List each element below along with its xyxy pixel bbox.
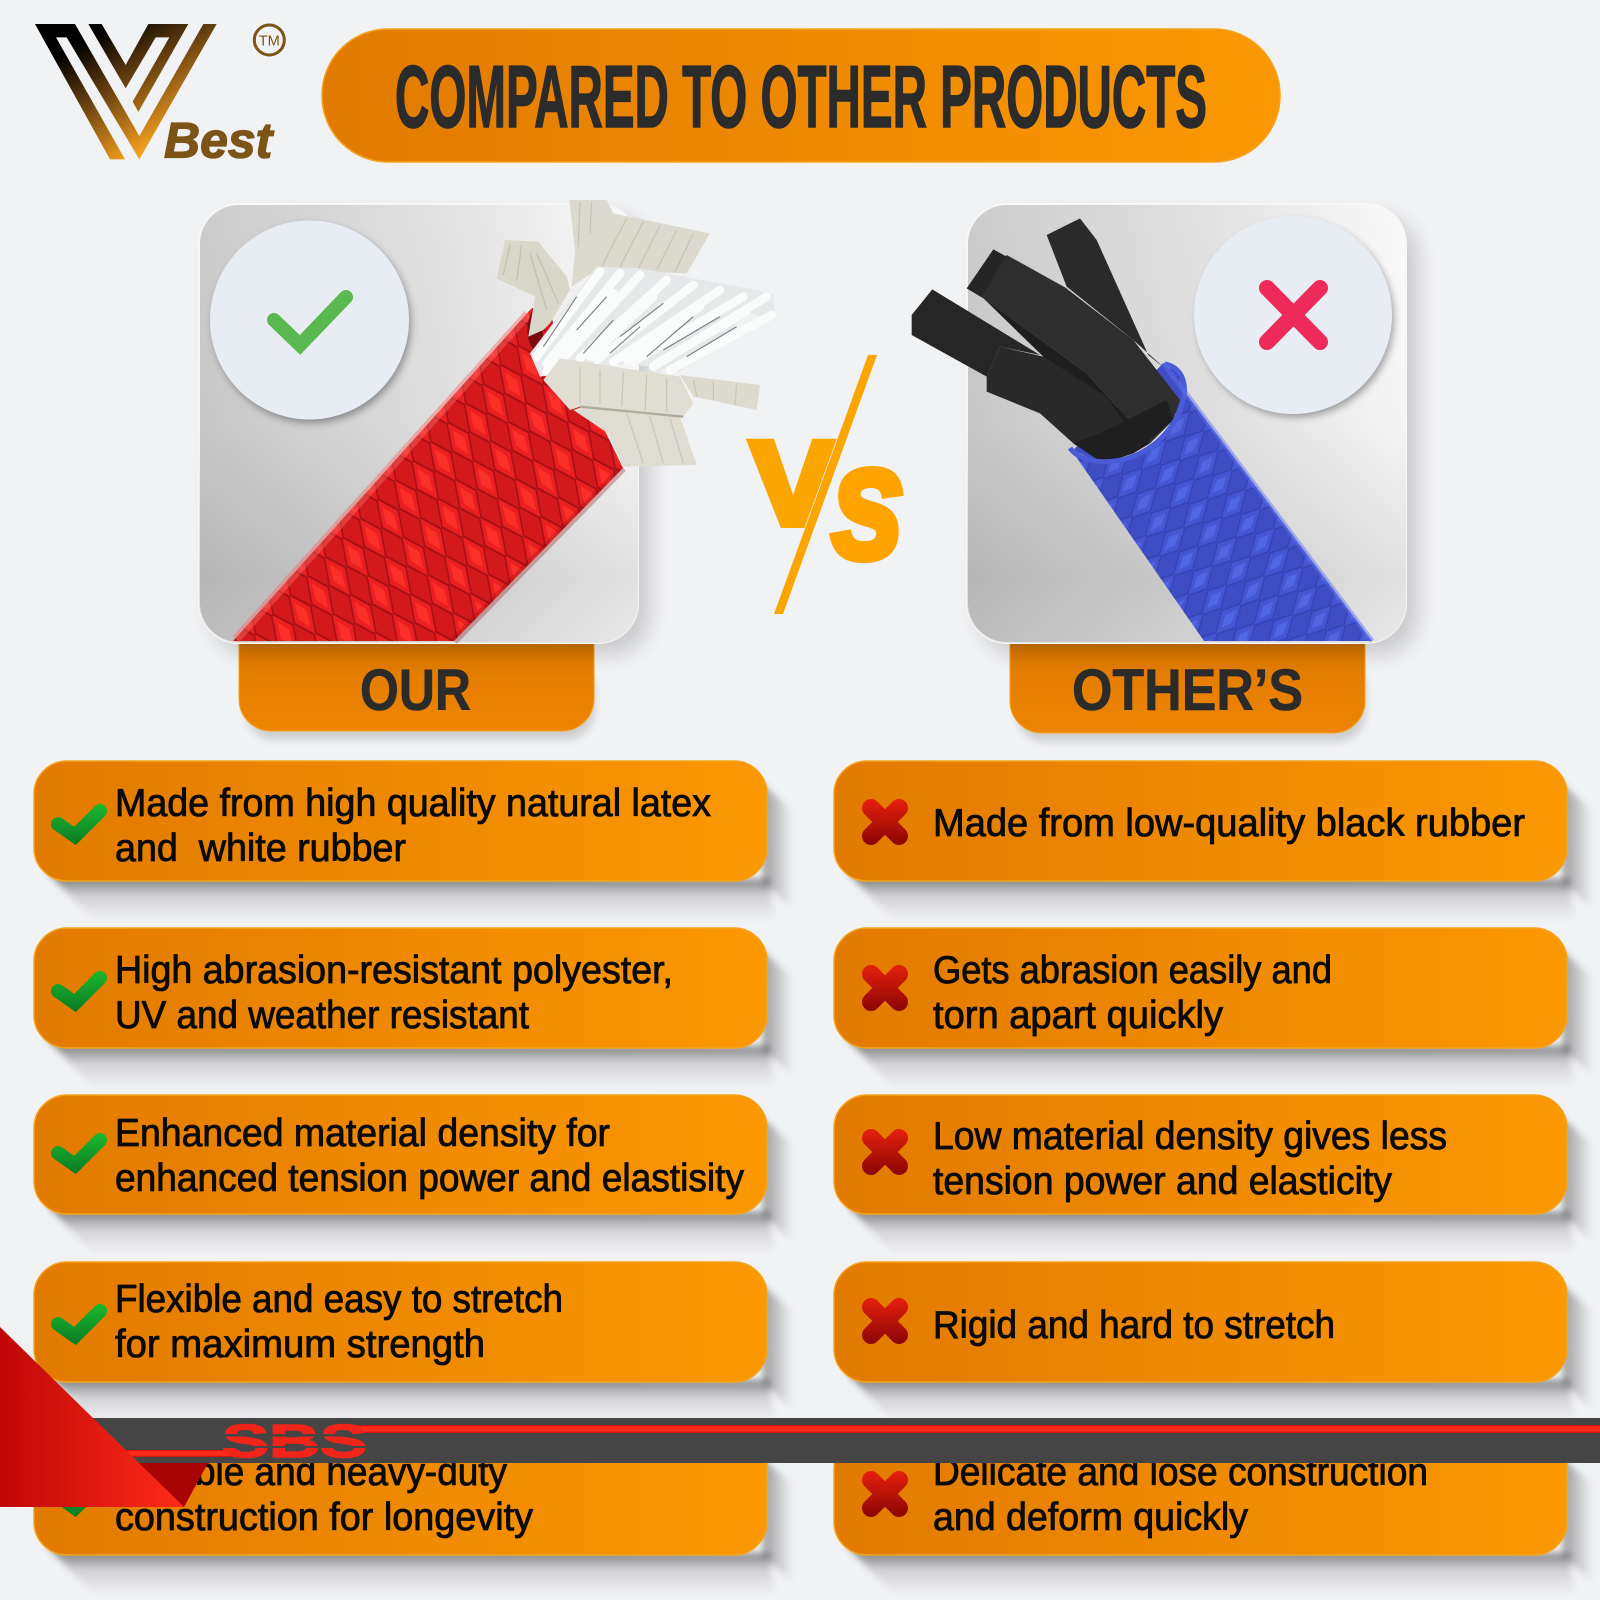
row: delicate: Delicate and lose construction xyxy=(933,1451,1428,1494)
rope opening xyxy=(1073,363,1184,467)
row: delicate xyxy=(834,1435,1593,1595)
letter s: s xyxy=(831,409,905,593)
row: delicate: and deform quickly xyxy=(933,1496,1248,1539)
row: abrasion: torn apart quickly xyxy=(933,994,1223,1037)
row: latex: Made from high quality natural latex xyxy=(115,782,711,825)
row: durable: Durable and heavy-duty xyxy=(115,1451,507,1494)
comparison rows: others xyxy=(834,761,1593,1595)
SBS logo: SBS xyxy=(222,1415,367,1467)
logo: VBest xyxy=(35,24,284,168)
row: abrasion resistant xyxy=(34,928,793,1088)
black rubber strands xyxy=(912,218,1184,467)
row: rigid xyxy=(834,1262,1593,1422)
row: flexible: Flexible and easy to stretch xyxy=(115,1278,563,1321)
ivory ribbon top xyxy=(569,200,710,287)
letter V: V xyxy=(751,418,835,550)
row: latex xyxy=(34,761,793,921)
row: flexible: for maximum strength xyxy=(115,1323,485,1366)
tab label: our: OUR xyxy=(360,658,471,723)
watermark band with SBS logo xyxy=(60,1415,1600,1467)
row: abrasion: Gets abrasion easily and xyxy=(933,949,1332,992)
panel: our product xyxy=(199,200,775,740)
diagonal slash xyxy=(774,355,877,614)
row: low density: tension power and elasticity xyxy=(933,1160,1392,1203)
photo card xyxy=(199,204,638,643)
row: durable xyxy=(34,1435,793,1595)
red braided rope xyxy=(233,303,623,641)
title banner xyxy=(322,29,1280,162)
ivory ribbon lower xyxy=(680,375,760,410)
row: black rubber xyxy=(834,761,1593,921)
row: material density xyxy=(34,1095,793,1254)
tab label: other's: OTHER’S xyxy=(1072,658,1303,723)
cross badge xyxy=(1194,216,1394,417)
strand front left xyxy=(912,289,1040,377)
row: rigid: Rigid and hard to stretch xyxy=(933,1304,1335,1347)
comparison rows: our xyxy=(34,761,793,1595)
row: abrasion resistant: UV and weather resistant xyxy=(115,994,529,1037)
row: abrasion resistant: High abrasion-resistant polyester, xyxy=(115,949,673,992)
row: low density: Low material density gives less xyxy=(933,1115,1447,1158)
ivory ribbon left xyxy=(497,240,570,337)
tab label: other's xyxy=(1010,625,1365,733)
photo card xyxy=(967,204,1406,643)
row: low density xyxy=(834,1095,1593,1254)
tab label: our xyxy=(239,625,594,731)
watermark corner triangle xyxy=(0,1327,208,1507)
row: material density: Enhanced material density for xyxy=(115,1112,610,1155)
check badge xyxy=(210,220,411,423)
logo wordmark: Best xyxy=(164,112,275,168)
row: black rubber: Made from low-quality black rubber xyxy=(933,802,1525,845)
row: durable: construction for longevity xyxy=(115,1496,533,1539)
row: latex: and white rubber xyxy=(115,827,406,870)
row: abrasion xyxy=(834,928,1593,1088)
strand back xyxy=(1047,218,1167,370)
row: material density: enhanced tension power and elastisity xyxy=(115,1157,744,1200)
trademark badge: TM xyxy=(259,33,280,49)
rubber strands: white and ivory xyxy=(497,200,775,467)
panel: other products xyxy=(912,204,1418,742)
strand middle xyxy=(982,255,1180,443)
trademark badge xyxy=(254,25,284,55)
versus mark xyxy=(751,355,905,614)
white fan of strands xyxy=(530,267,775,377)
logo mark inner V xyxy=(88,24,188,112)
row: flexible xyxy=(34,1262,793,1422)
logo mark outer V xyxy=(35,24,217,159)
blue braided rope xyxy=(1070,363,1372,641)
